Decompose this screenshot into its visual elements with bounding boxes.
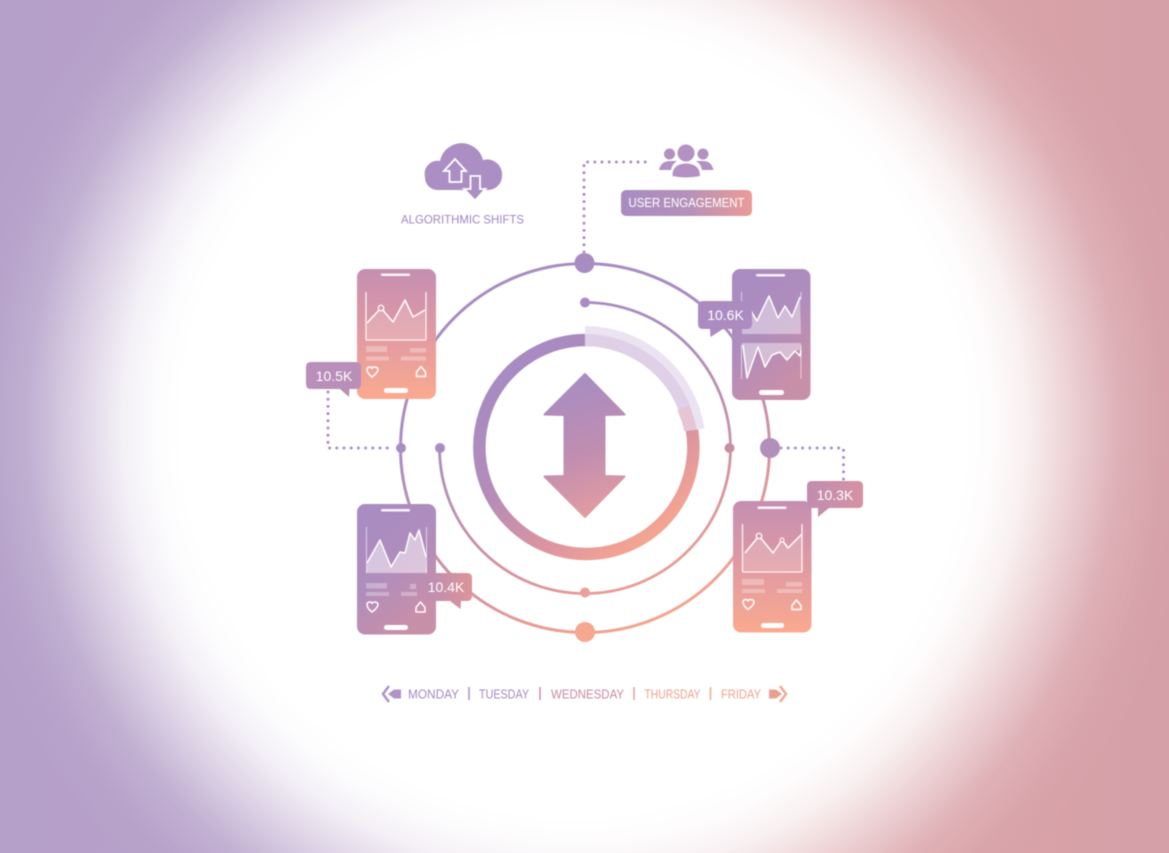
- icon: right arrow: [769, 686, 786, 702]
- callout: 10.5K: [306, 362, 361, 397]
- icon: users group: [659, 144, 714, 178]
- callout: 10.4K: 10.4K: [428, 579, 465, 595]
- callout: 10.4K: [427, 573, 472, 609]
- phone: top right: [732, 269, 810, 400]
- icon: left arrow: [383, 686, 401, 702]
- phone: bottom right: [733, 501, 812, 632]
- timeline separators: [469, 687, 710, 700]
- callout: 10.6K: [698, 301, 752, 337]
- callout: 10.3K: [807, 481, 863, 517]
- icons: heart and home: [743, 600, 801, 610]
- day: Thursday: THURSDAY: [644, 688, 701, 702]
- lower area chart: [742, 343, 801, 379]
- label pill: user engagement: USER ENGAGEMENT: [628, 196, 745, 210]
- central double arrow: [544, 374, 624, 517]
- day: Monday: MONDAY: [408, 688, 460, 702]
- icons: heart and home: [367, 366, 426, 377]
- dotted connector: right: [781, 448, 844, 481]
- icons: heart and home: [367, 602, 425, 612]
- line chart: [366, 292, 426, 340]
- day: Wednesday: WEDNESDAY: [551, 688, 625, 702]
- label: algorithmic shifts: ALGORITHMIC SHIFTS: [401, 212, 524, 226]
- phone: top left: [357, 269, 436, 399]
- area chart: [366, 527, 427, 573]
- phone: bottom left: [357, 504, 436, 634]
- concentric rings diagram: [396, 253, 780, 642]
- core progress ring: [479, 330, 700, 554]
- weekday timeline: [383, 686, 786, 702]
- upper area chart: [742, 292, 801, 334]
- callout: 10.6K: 10.6K: [707, 307, 744, 323]
- icon: cloud with up and down arrows: [425, 143, 502, 200]
- callout: 10.5K: 10.5K: [316, 368, 353, 384]
- outer ring: [400, 264, 770, 632]
- line chart: [742, 524, 802, 572]
- label pill: user engagement: [621, 190, 752, 216]
- dotted connector: top: [584, 162, 650, 252]
- inner open ring: [439, 302, 730, 594]
- day: Friday: FRIDAY: [721, 688, 762, 702]
- callout: 10.3K: 10.3K: [817, 487, 854, 503]
- ring nodes: [396, 253, 780, 642]
- day: Tuesday: TUESDAY: [479, 688, 530, 702]
- dotted connector: left: [328, 392, 394, 448]
